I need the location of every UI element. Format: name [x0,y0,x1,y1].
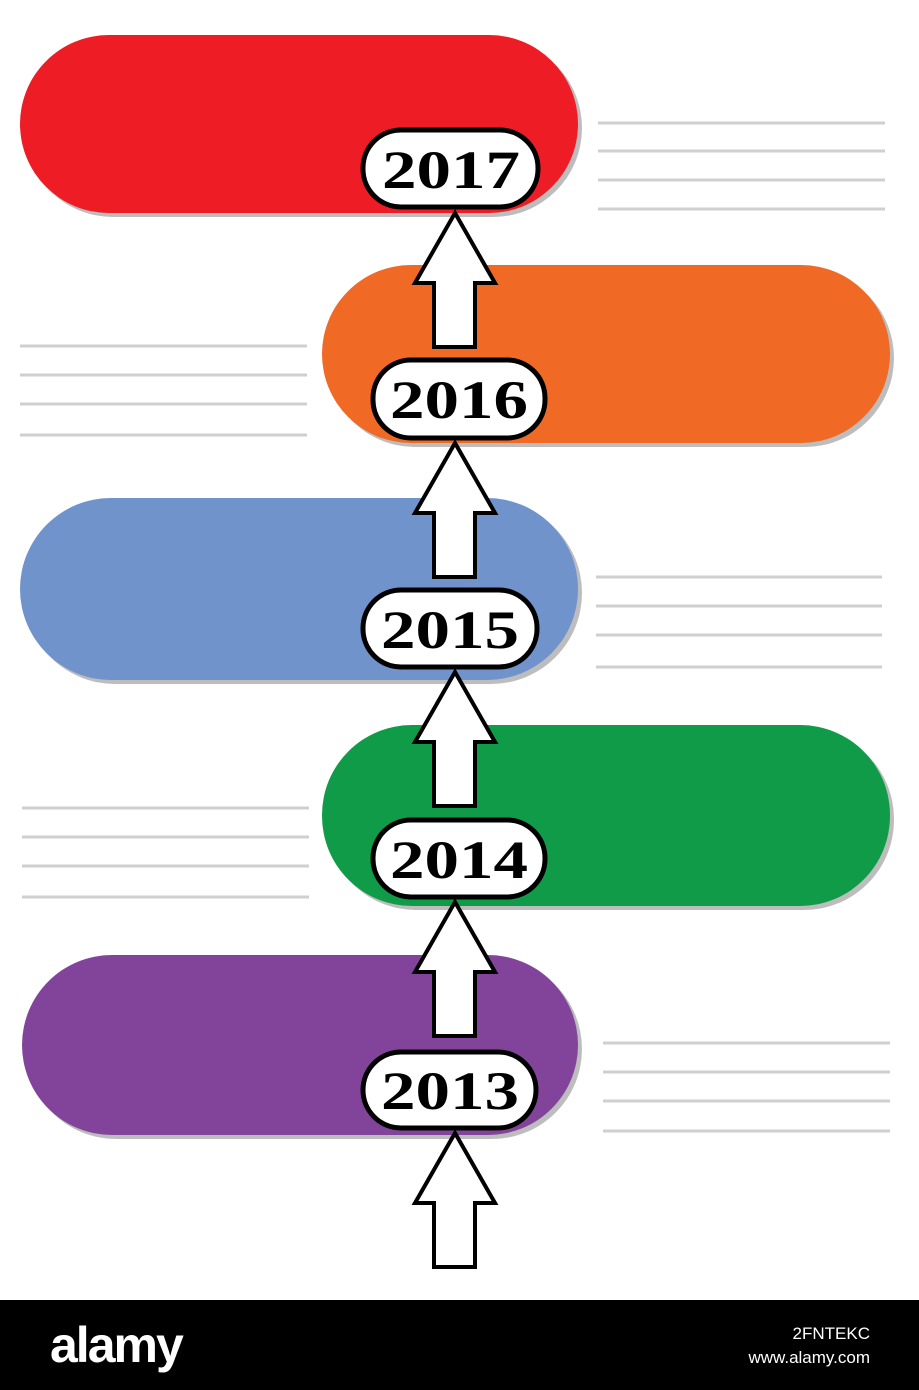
footer id: 2FNTEKC [793,1324,870,1343]
panel: 2017 red [20,35,582,217]
arrow: start [415,1133,495,1267]
footer bar [0,1300,919,1390]
text lines: 2017 [598,123,885,209]
arrow: 2016 to 2017 [415,213,495,347]
arrow: 2014 to 2015 [415,672,495,806]
panel: 2013 purple [22,955,582,1139]
year label 2016: 2016 [390,370,528,430]
year label 2014 [373,820,545,897]
footer logo: alamy [50,1317,184,1373]
year label 2017: 2017 [382,140,520,200]
arrow: 2013 to 2014 [415,902,495,1036]
year label 2014: 2014 [390,830,528,890]
footer url: www.alamy.com [747,1348,870,1367]
text lines: 2014 [22,808,309,897]
year label 2015: 2015 [381,600,519,660]
text lines: 2016 [20,346,307,435]
year label 2016 [373,360,545,438]
arrow: 2015 to 2016 [415,443,495,577]
text lines: 2015 [596,577,882,667]
year label 2013 [363,1052,536,1128]
year label 2017 [363,130,538,207]
panel: 2016 orange [322,265,894,447]
text lines: 2013 [603,1043,890,1131]
year label 2013: 2013 [381,1061,519,1121]
panel: 2015 blue [20,498,582,684]
year label 2015 [363,590,537,667]
panel: 2014 green [322,725,894,910]
